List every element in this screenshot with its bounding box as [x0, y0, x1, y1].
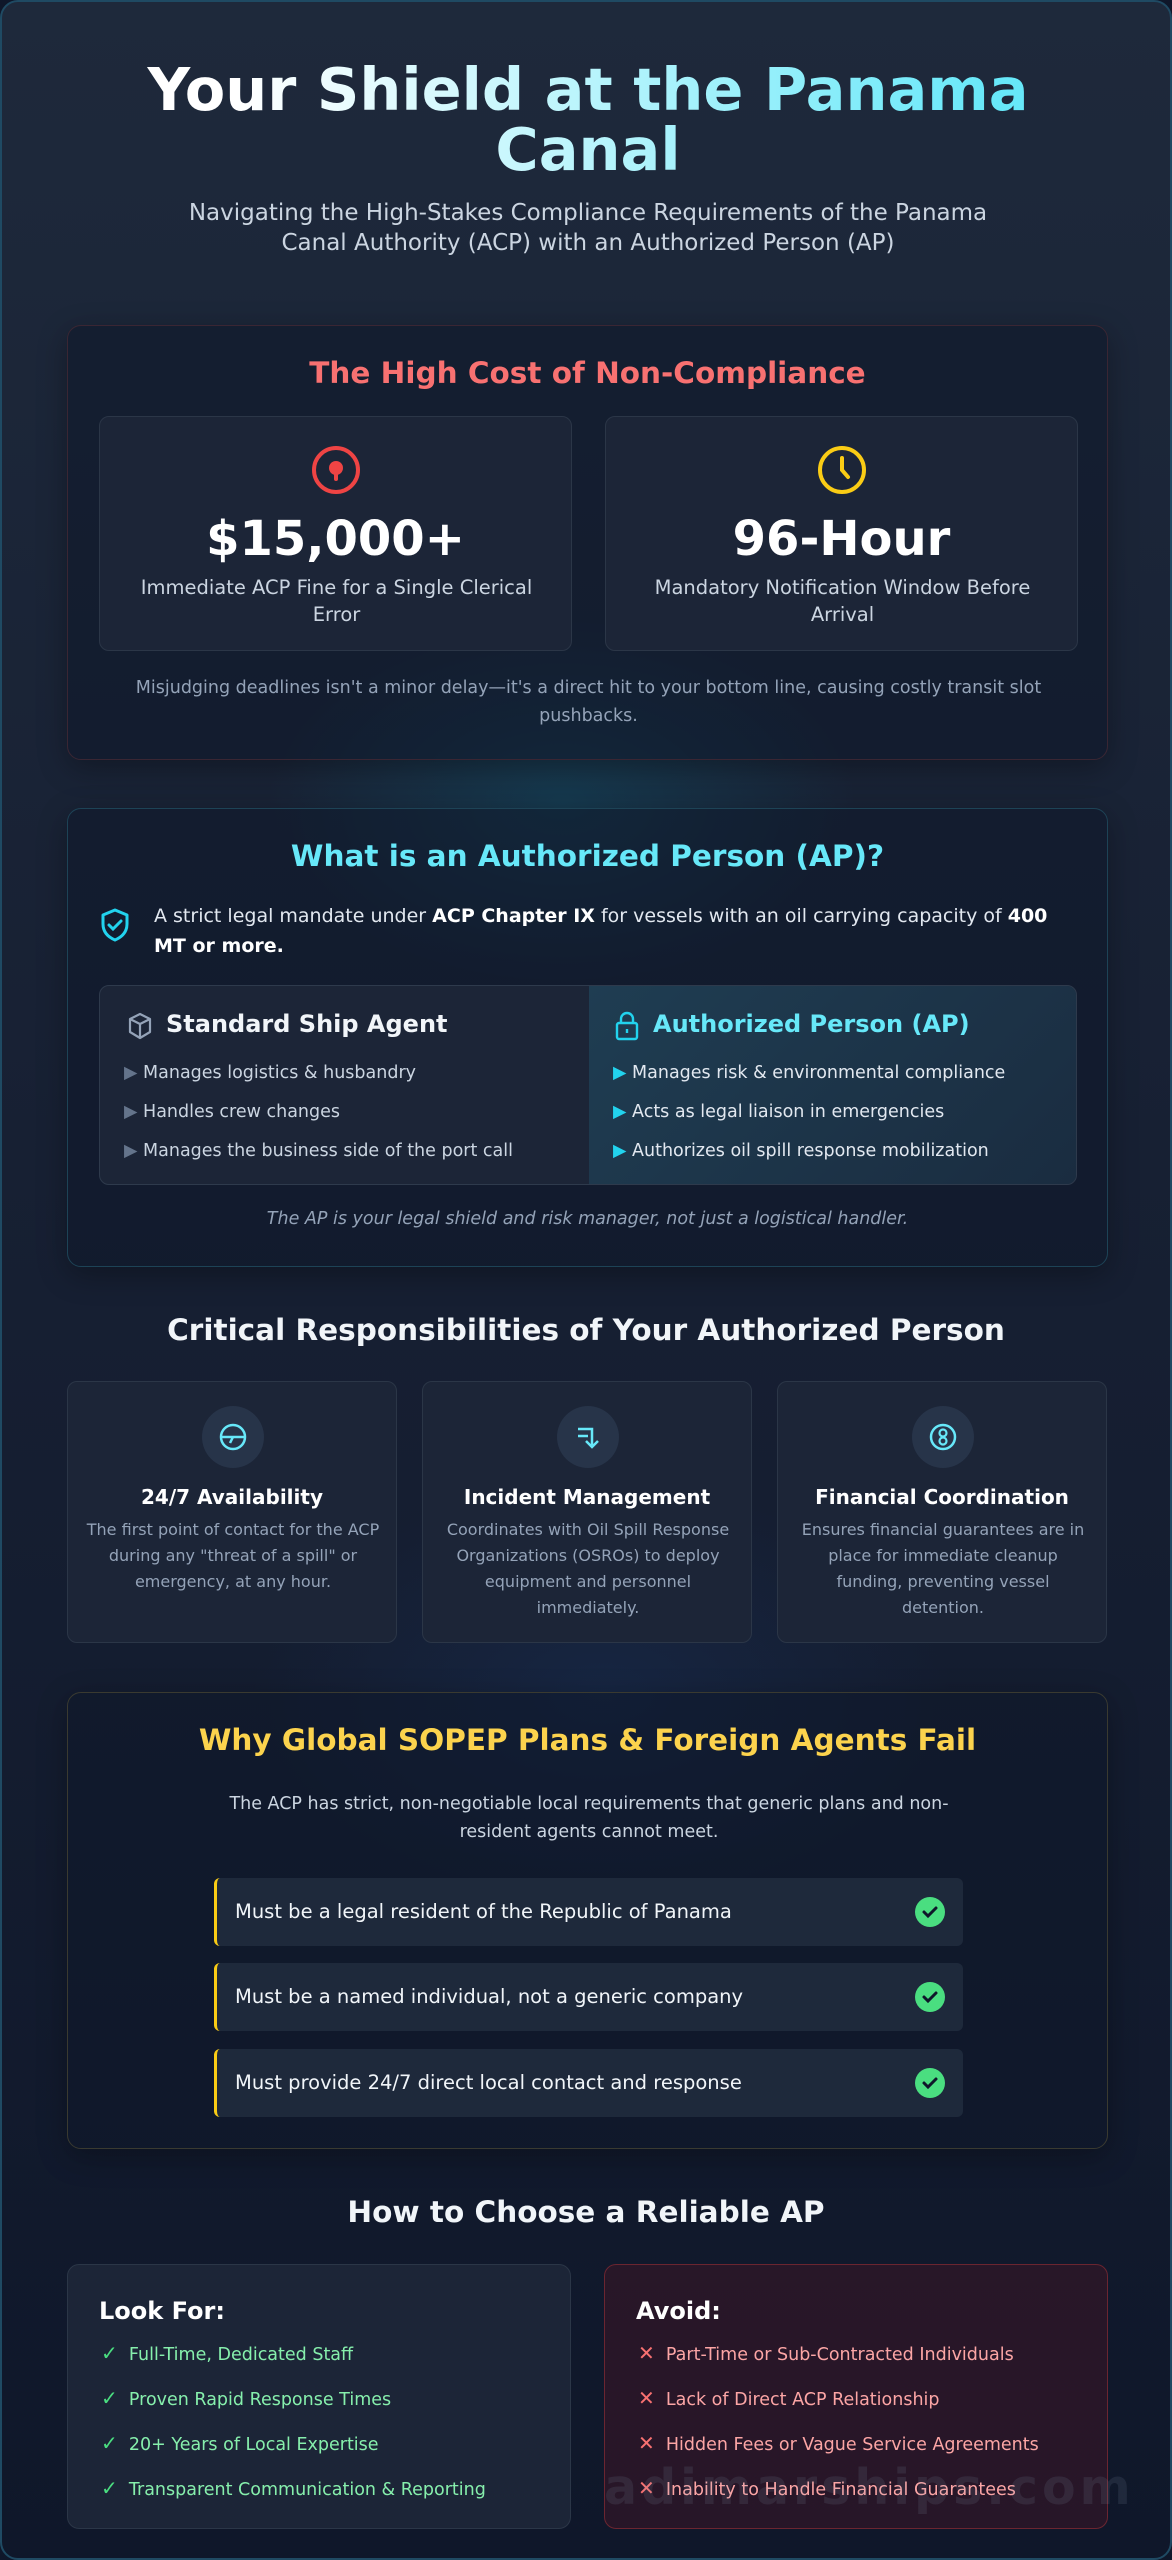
panel: high cost of non-compliance	[67, 325, 1108, 760]
card: avoid: ✕ Lack of Direct ACP Relationship	[638, 2386, 940, 2410]
stat: $15,000+: $15,000+	[206, 511, 465, 567]
card: look for: ✓ 20+ Years of Local Expertise	[101, 2431, 379, 2455]
column: standard ship agent: ▶ Manages the business side of the port call	[124, 1141, 513, 1161]
heading: how to choose: How to Choose a Reliable AP	[347, 2195, 825, 2229]
card: look for: Look For:	[99, 2297, 225, 2325]
card: incident management: Coordinates with Oil Spill Response Organizations (OSROs) to deploy equipment and personnel immediately.	[447, 1520, 729, 1617]
card: financial coordination: Ensures financial guarantees are in place for immediate cleanup funding, preventing vessel detention.	[802, 1520, 1084, 1617]
subtitle	[189, 200, 987, 256]
requirement 3: Must provide 24/7 direct local contact and response	[235, 2071, 742, 2094]
panel: what is an AP	[67, 808, 1108, 1267]
card: look for	[67, 2264, 571, 2529]
card: financial coordination: Financial Coordination	[815, 1485, 1069, 1509]
stat desc: Mandatory Notification Window Before Arrival	[655, 576, 1030, 626]
card: look for: ✓ Proven Rapid Response Times	[101, 2386, 391, 2410]
heading: what is AP: What is an Authorized Person (AP)?	[291, 839, 884, 873]
intro: The ACP has strict, non-negotiable local requirements that generic plans and non-resident agents cannot meet.	[229, 1794, 949, 1842]
watermark: adimarships.com	[604, 2459, 1135, 2516]
requirement 1	[214, 1878, 963, 1946]
card: avoid: ✕ Inability to Handle Financial Guarantees	[638, 2476, 1016, 2500]
icon: clock	[818, 446, 866, 494]
note: Misjudging deadlines isn't a minor delay—it's a direct hit to your bottom line, causing costly transit slot pushbacks.	[136, 678, 1041, 726]
stat card: fine	[99, 416, 572, 651]
requirement 1: Must be a legal resident of the Republic of Panama	[235, 1900, 732, 1923]
title	[2, 60, 1172, 180]
icon: shield	[102, 908, 128, 942]
icon: fine	[312, 446, 360, 494]
card: financial coordination	[777, 1381, 1107, 1643]
column: authorized person	[589, 986, 1078, 1186]
column: standard ship agent: Standard Ship Agent	[166, 1010, 448, 1038]
column: standard ship agent: ▶ Handles crew changes	[124, 1102, 340, 1122]
column: authorized person: ▶ Manages risk & environmental compliance	[613, 1063, 1005, 1083]
mandate text: A strict legal mandate under ACP Chapter IX for vessels with an oil carrying capacity of 400 MT or more.	[154, 905, 1047, 957]
card: avoid: Avoid:	[636, 2297, 721, 2325]
panel: why global SOPEP plans fail	[67, 1692, 1108, 2149]
card: look for: ✓ Transparent Communication & Reporting	[101, 2476, 486, 2500]
italic note: The AP is your legal shield and risk manager, not just a logistical handler.	[267, 1209, 908, 1229]
heading: SOPEP: Why Global SOPEP Plans & Foreign Agents Fail	[199, 1723, 976, 1757]
column: authorized person: Authorized Person (AP)	[653, 1010, 970, 1038]
title: Your Shield at the Panama	[147, 55, 1029, 124]
card: incident management: Incident Management	[464, 1485, 710, 1509]
card: 24/7 availability: 24/7 Availability	[141, 1485, 323, 1509]
heading: critical responsibilities: Critical Responsibilities of Your Authorized Person	[167, 1313, 1005, 1347]
stat desc: Immediate ACP Fine for a Single Clerical Error	[141, 576, 532, 626]
heading: high cost: The High Cost of Non-Compliance	[309, 356, 866, 390]
stat card: 96-hour	[605, 416, 1078, 651]
column: authorized person: ▶ Acts as legal liaison in emergencies	[613, 1102, 944, 1122]
subtitle: Canal Authority (ACP) with an Authorized Person (AP)	[281, 230, 894, 256]
requirement 3	[214, 2049, 963, 2117]
card: 24/7 availability: The first point of contact for the ACP during any "threat of a spill" or emergency, at any hour.	[87, 1520, 379, 1591]
icon: clock circle	[202, 1406, 264, 1468]
icon: arrows	[557, 1406, 619, 1468]
column: standard ship agent	[124, 1010, 513, 1161]
requirement 2	[214, 1963, 963, 2031]
icon: lock	[616, 1012, 638, 1040]
title: Canal	[495, 115, 681, 184]
requirement 2: Must be a named individual, not a generic company	[235, 1985, 743, 2008]
icon: box	[128, 1012, 152, 1040]
stat: 96-hour: 96-Hour	[733, 511, 950, 567]
column: standard ship agent: ▶ Manages logistics & husbandry	[124, 1063, 416, 1083]
subtitle: Navigating the High-Stakes Compliance Requirements of the Panama	[189, 200, 987, 226]
column: authorized person: ▶ Authorizes oil spill response mobilization	[613, 1141, 989, 1161]
card: look for: ✓ Full-Time, Dedicated Staff	[101, 2341, 353, 2365]
icon: coins	[912, 1406, 974, 1468]
card: avoid: ✕ Part-Time or Sub-Contracted Individuals	[638, 2341, 1014, 2365]
comparison box	[99, 985, 1077, 1185]
card: avoid	[604, 2264, 1108, 2529]
card: incident management	[422, 1381, 752, 1643]
card: avoid: ✕ Hidden Fees or Vague Service Agreements	[638, 2431, 1039, 2455]
card: 24/7 availability	[67, 1381, 397, 1643]
